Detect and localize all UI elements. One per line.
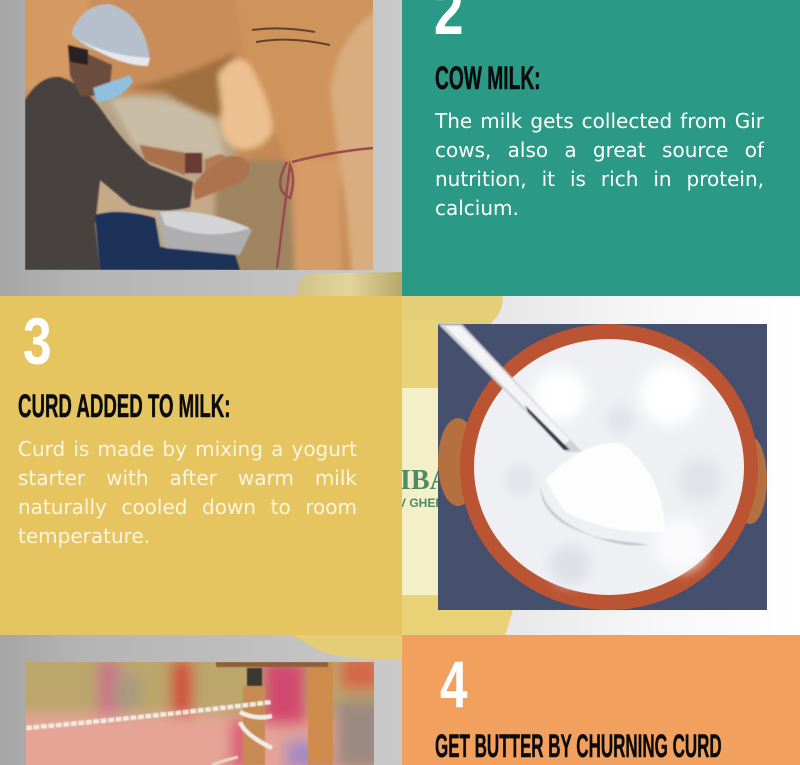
panel: step 3 curd added to milk — [0, 296, 402, 635]
bucket — [157, 210, 252, 255]
photo: wooden curd churner with rope — [26, 662, 374, 765]
body text: curd: naturally cooled down to room — [18, 495, 357, 519]
body text: cow milk — [435, 109, 764, 220]
heading: curd added to milk: CURD ADDED TO MILK: — [18, 388, 230, 424]
ghee jar label text — [402, 466, 438, 510]
body text: curd — [18, 437, 357, 548]
heading: get butter: GET BUTTER BY CHURNING CURD — [435, 728, 722, 764]
step number 3: 3 — [23, 304, 52, 378]
body text: cow milk: The milk gets collected from Gir — [435, 109, 764, 133]
heading: cow milk: COW MILK: — [435, 60, 541, 96]
rope — [277, 148, 373, 268]
body text: curd: starter with after warm milk — [18, 466, 357, 490]
body text: curd: temperature. — [18, 524, 150, 548]
photo: farmer milking a cow — [25, 0, 373, 270]
panel: step 4 butter — [402, 635, 800, 765]
trousers — [95, 212, 240, 270]
body text: cow milk: cows, also a great source of — [435, 138, 764, 162]
photo: bowl of curd — [438, 324, 767, 610]
head — [68, 45, 112, 96]
body text: curd: Curd is made by mixing a yogurt — [18, 437, 357, 461]
panel: step 2 cow milk — [402, 0, 800, 296]
body text: cow milk: calcium. — [435, 196, 519, 220]
body text: cow milk: nutrition, it is rich in protein, — [435, 167, 764, 191]
step number 4: 4 — [440, 647, 468, 721]
man — [25, 77, 193, 270]
